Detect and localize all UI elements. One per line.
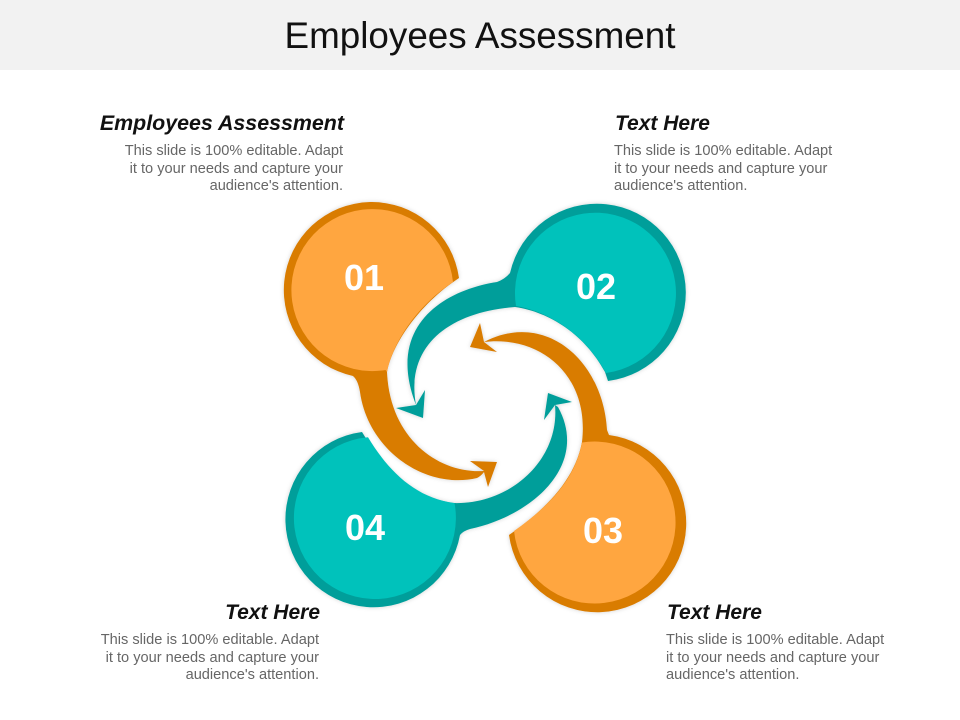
- text block: top right: [614, 112, 832, 194]
- text block: bottom left: [101, 601, 320, 683]
- text block: bottom left: audience's attention.: [186, 667, 319, 683]
- step 02: teal circle with arrow: 02: [576, 266, 616, 307]
- text block: bottom right: [666, 601, 884, 683]
- text block: bottom left: it to your needs and capture your: [106, 650, 319, 666]
- text block: top left: it to your needs and capture your: [130, 161, 343, 177]
- text block: top left: This slide is 100% editable. Adapt: [125, 143, 343, 159]
- text block: top right: it to your needs and capture your: [614, 161, 828, 177]
- text block: bottom right: Text Here: [667, 601, 762, 624]
- text block: bottom right: This slide is 100% editable. Adapt: [666, 632, 884, 648]
- text block: top left: audience's attention.: [210, 178, 343, 194]
- title band: Employees Assessment: [285, 15, 675, 56]
- step 01: orange circle with arrow: 01: [344, 257, 384, 298]
- text block: top right: This slide is 100% editable. Adapt: [614, 143, 832, 159]
- text block: top left: [100, 111, 345, 194]
- step 03: orange circle with arrow: 03: [583, 510, 623, 551]
- text block: bottom left: Text Here: [225, 601, 320, 624]
- title band: [0, 0, 960, 70]
- text block: top right: audience's attention.: [614, 178, 747, 194]
- text block: bottom right: audience's attention.: [666, 667, 799, 683]
- text block: bottom left: This slide is 100% editable. Adapt: [101, 632, 319, 648]
- step 02: teal circle with arrow: [396, 204, 686, 418]
- text block: bottom right: it to your needs and capture your: [666, 650, 880, 666]
- step 03: orange circle with arrow: [470, 323, 686, 612]
- step 01: orange circle with arrow: [284, 202, 497, 487]
- step 04: teal circle with arrow: 04: [345, 507, 385, 548]
- text block: top right: Text Here: [615, 112, 710, 135]
- text block: top left: Employees Assessment: [100, 111, 345, 135]
- step 04: teal circle with arrow: [285, 393, 572, 607]
